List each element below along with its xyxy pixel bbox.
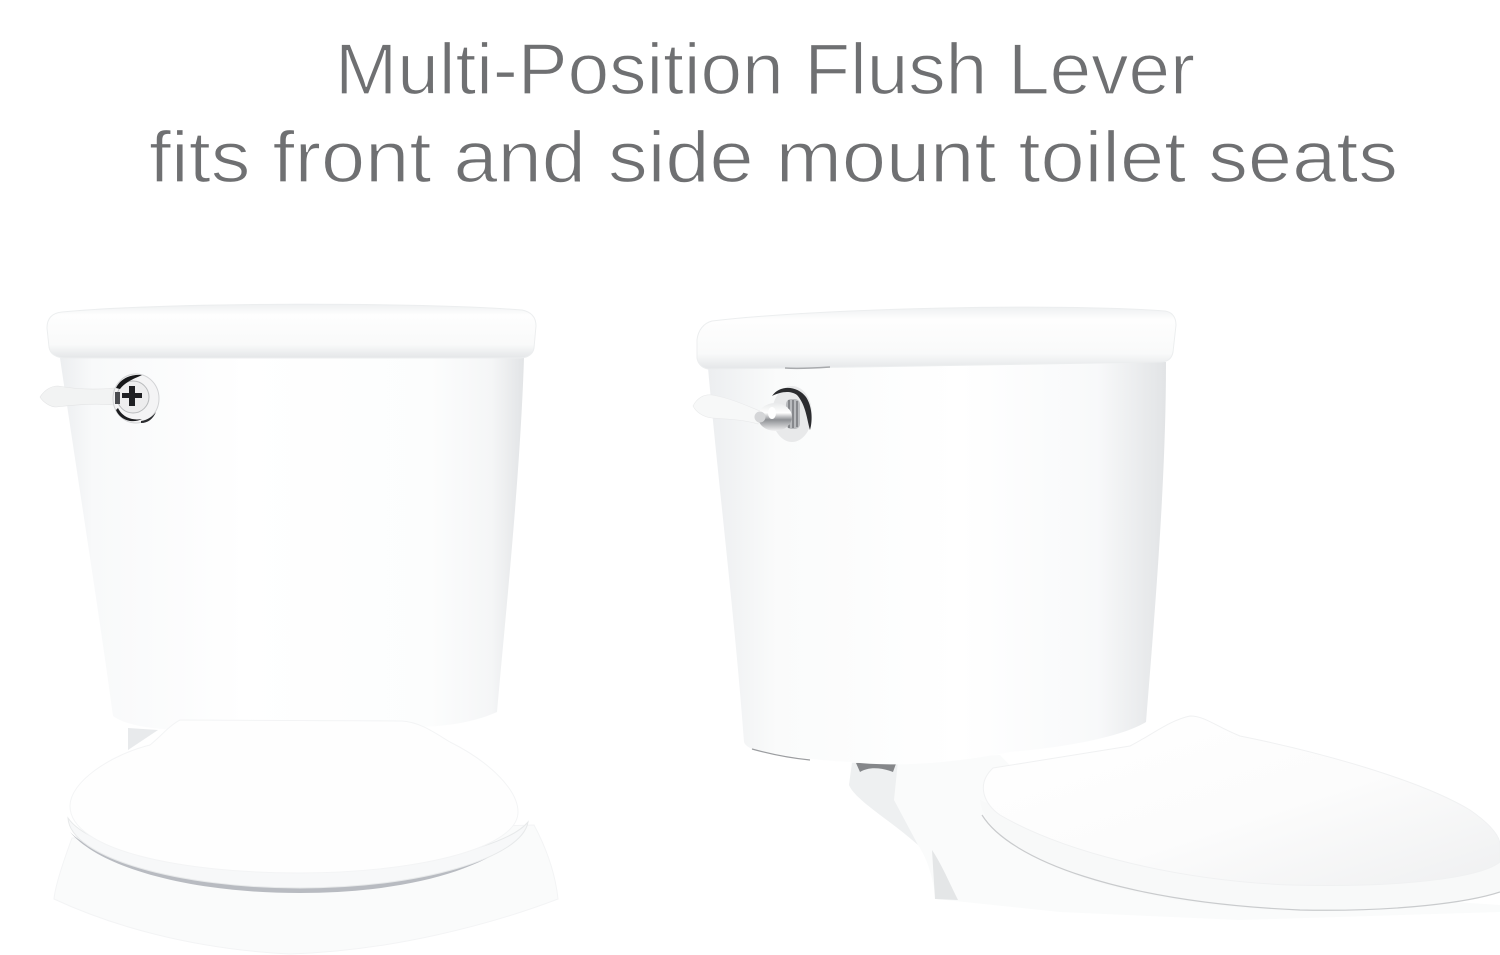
seat ring bbox=[980, 800, 1500, 911]
title bbox=[149, 30, 1398, 198]
seat ring bbox=[68, 818, 528, 888]
right toilet: side mount seat bbox=[693, 307, 1500, 920]
title: Multi-Position Flush Lever bbox=[335, 30, 1195, 110]
seat lid bbox=[983, 716, 1500, 886]
left toilet: front mount seat bbox=[40, 304, 558, 954]
bowl base bbox=[54, 825, 558, 954]
tank lid bbox=[697, 307, 1176, 369]
seat lid bbox=[70, 720, 518, 873]
tank body bbox=[708, 362, 1166, 764]
drain stub bbox=[128, 728, 158, 750]
tank body bbox=[60, 358, 524, 730]
rim shadow bbox=[70, 832, 524, 893]
flush lever bbox=[693, 386, 812, 442]
bowl and trapway bbox=[849, 755, 1500, 920]
ring shadow line bbox=[982, 815, 1500, 910]
tank lid bbox=[47, 304, 536, 358]
flush lever bbox=[40, 374, 159, 423]
title: fits front and side mount toilet seats bbox=[149, 118, 1398, 198]
